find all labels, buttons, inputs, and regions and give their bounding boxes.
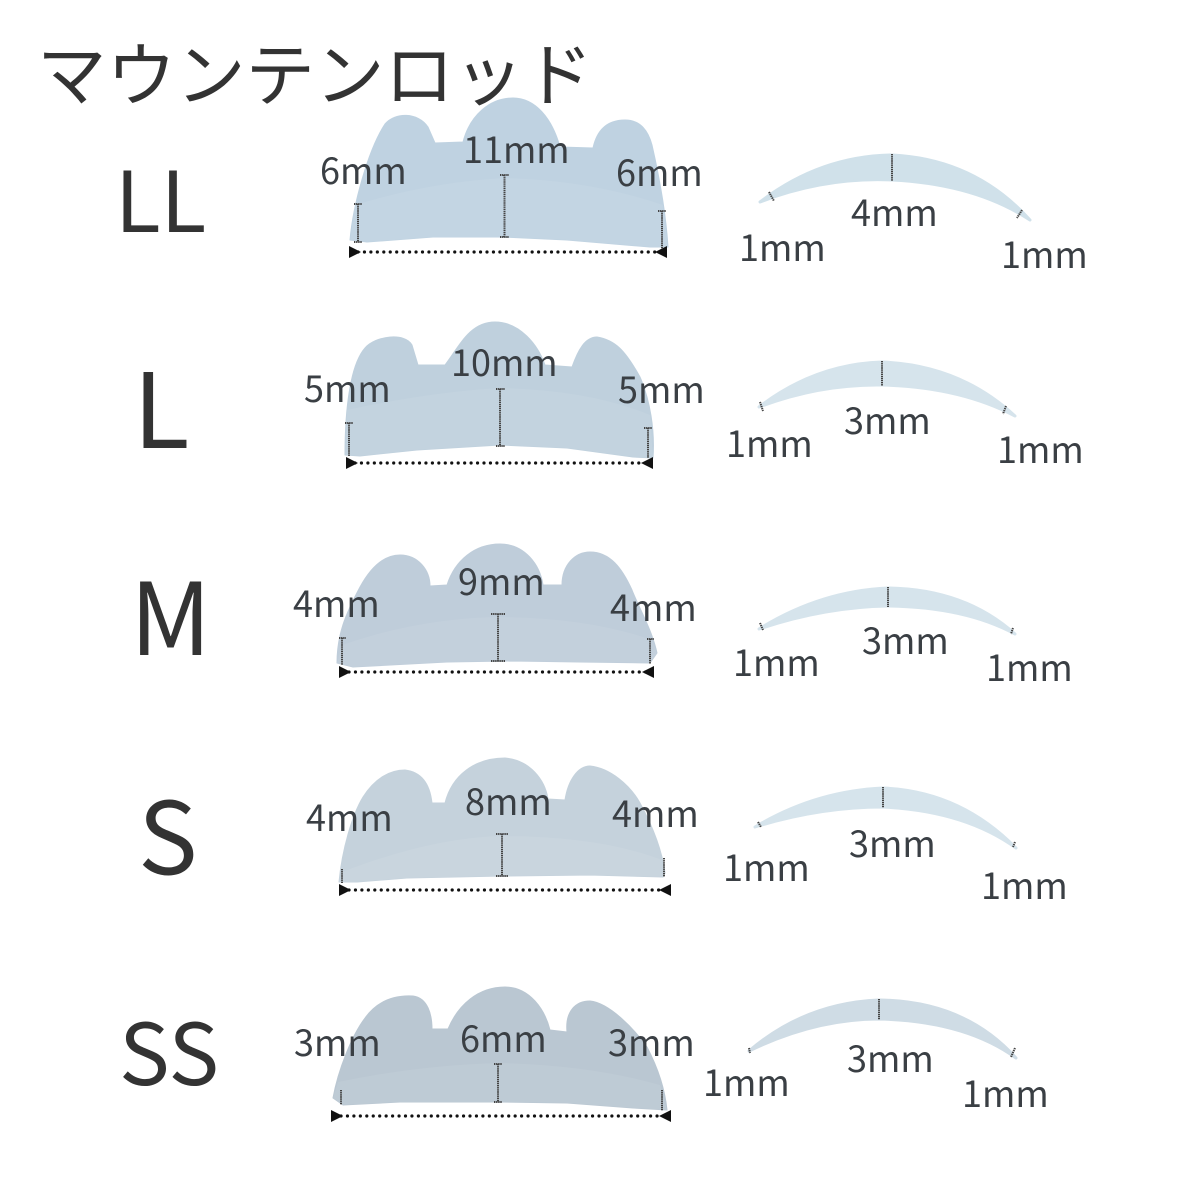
measurement labels S front: 8mm [465,774,552,826]
side labels SS [703,1031,1049,1118]
measurement labels LL front: 6mm [616,145,703,197]
side ticks SS [749,999,1015,1057]
size label M: M [130,539,211,684]
measurement labels L front: 5mm [304,361,391,413]
width arrow S [339,884,671,896]
thin side profile SS [749,1000,1016,1058]
mountain rod S front view [339,758,665,882]
side labels SS: 1mm [962,1066,1049,1118]
size label L: L [133,327,189,478]
side labels S: 1mm [723,840,810,892]
measurement labels M front: 9mm [458,554,545,606]
size label SS: SS [119,987,219,1110]
side ticks M [760,587,1013,634]
measurement labels SS front: 3mm [608,1015,695,1067]
measurement labels L front [304,335,705,414]
side labels LL: 1mm [739,220,826,272]
measurement labels S front: 4mm [306,790,393,842]
measurement labels SS front [294,1011,695,1067]
size label LL: LL [115,136,206,257]
measurement labels M front: 4mm [610,580,697,632]
mountain rod M front view [337,544,657,667]
measurement labels SS front: 6mm [460,1011,547,1063]
thin side profile M [759,588,1015,634]
side ticks S [758,787,1015,847]
side ticks L [760,361,1006,414]
row: size LL [115,98,1088,279]
measurement labels M front: 4mm [293,576,380,628]
mountain rod L front view [345,322,653,458]
row: size S [138,758,1068,910]
height ticks S [342,834,664,883]
row: size L [133,322,1084,478]
thin side profile LL [760,155,1030,220]
side labels SS: 1mm [703,1055,790,1107]
side labels S: 3mm [849,816,936,868]
width arrow M [339,666,654,678]
measurement labels L front: 10mm [451,335,558,387]
side ticks LL [769,154,1022,218]
thin side profile L [759,362,1015,416]
height ticks LL [354,175,666,250]
measurement labels S front [306,774,699,842]
side labels L [726,393,1084,474]
side labels M [733,613,1073,692]
thin side profile S [755,788,1016,848]
side labels S [723,816,1068,910]
width arrow L [346,457,653,469]
height ticks SS [341,1064,662,1111]
row: size SS [119,987,1049,1122]
measurement labels S front: 4mm [612,786,699,838]
measurement labels SS front: 3mm [294,1015,381,1067]
mountain rod LL front view [350,98,668,247]
measurement labels LL front: 6mm [320,143,407,195]
row: size M [130,539,1073,692]
side labels M: 1mm [986,640,1073,692]
measurement labels L front: 5mm [618,362,705,414]
side labels LL [739,185,1088,279]
height ticks L [345,389,652,458]
side labels M: 3mm [862,613,949,665]
width arrow SS [331,1110,671,1122]
title: マウンテンロッド [37,20,593,121]
side labels LL: 4mm [851,185,938,237]
side labels S: 1mm [981,858,1068,910]
side labels L: 1mm [726,416,813,468]
side labels L: 1mm [997,422,1084,474]
measurement labels LL front [320,122,703,197]
measurement labels M front [293,554,697,632]
side labels SS: 3mm [847,1031,934,1083]
height ticks M [339,614,654,665]
side labels LL: 1mm [1001,227,1088,279]
mountain rod SS front view [333,987,667,1110]
side labels M: 1mm [733,635,820,687]
side labels L: 3mm [844,393,931,445]
size label S: S [138,758,198,903]
measurement labels LL front: 11mm [463,122,570,174]
width arrow LL [349,246,667,258]
